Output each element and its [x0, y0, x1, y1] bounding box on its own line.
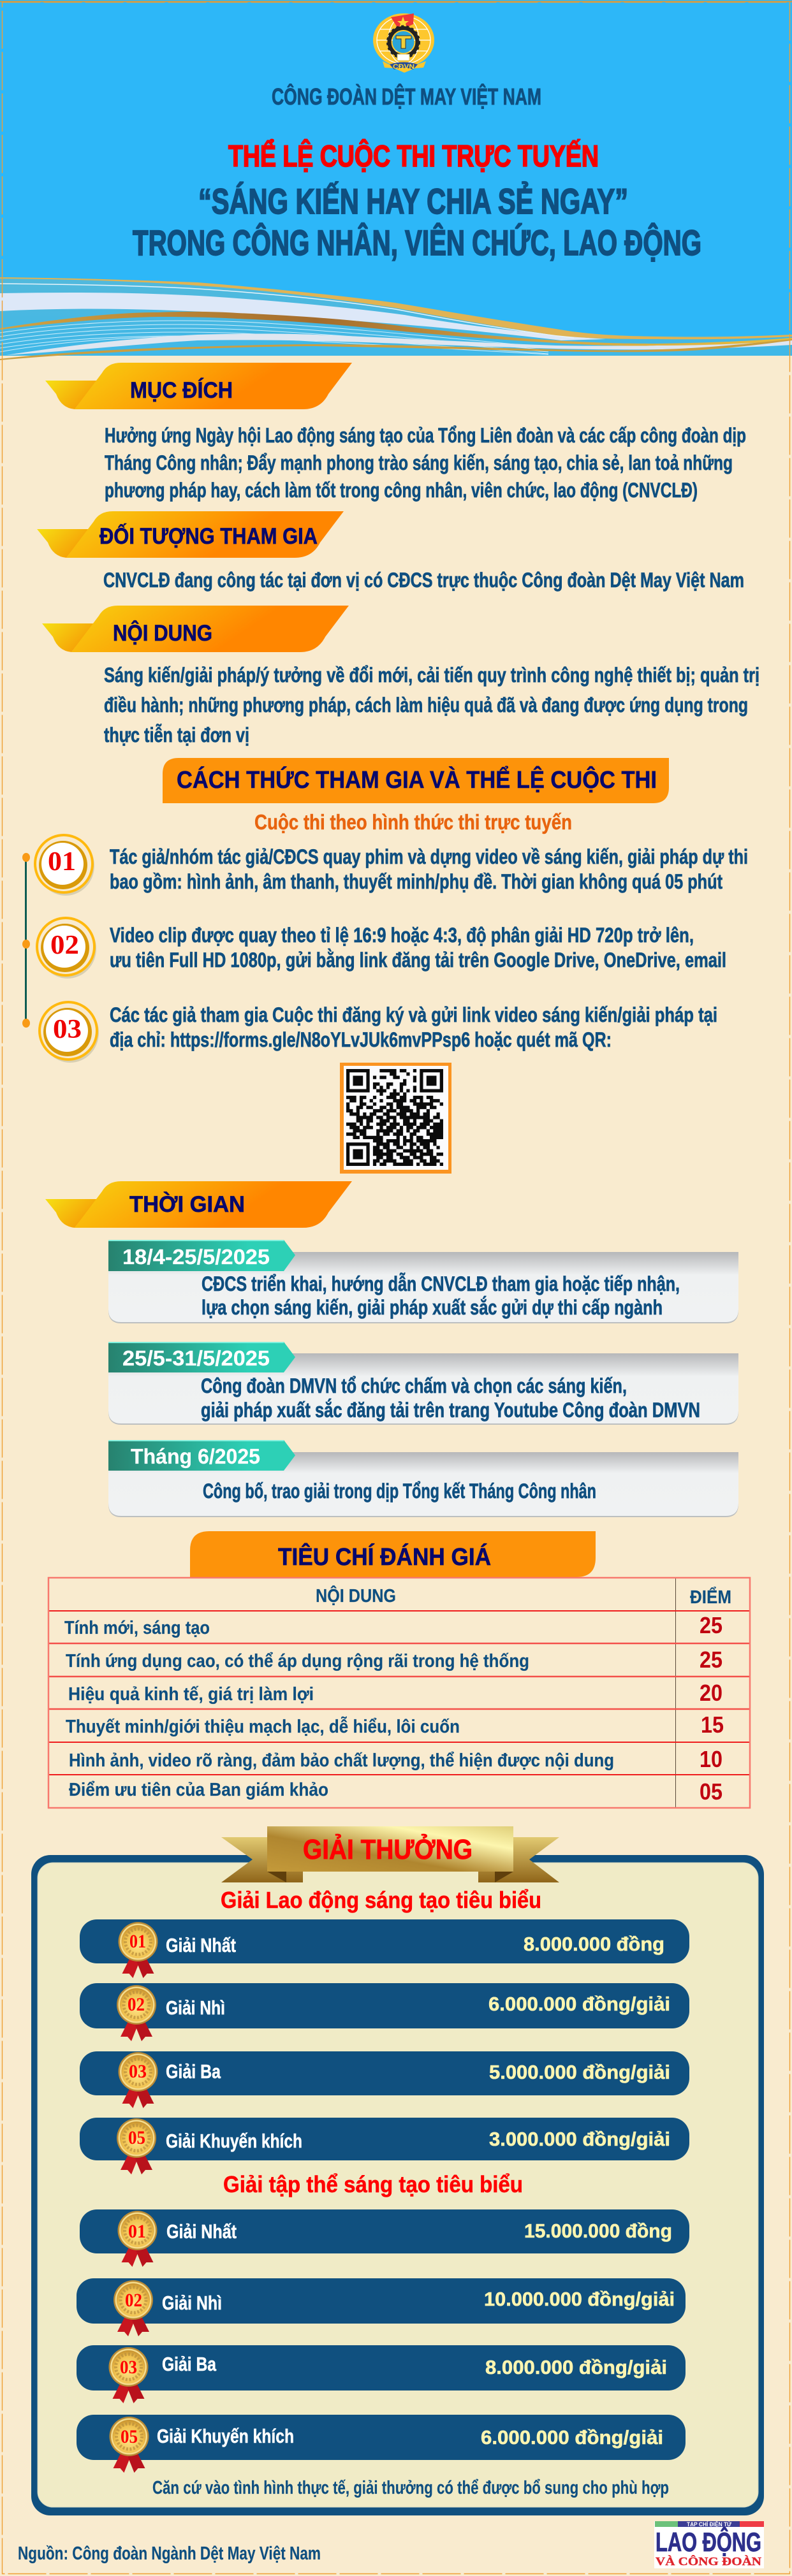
card 1 text: lựa chọn sáng kiến, giải pháp xuất sắc gửi dự thi cấp ngành — [202, 1296, 663, 1319]
table header: ĐIỂM — [690, 1586, 731, 1608]
icon: medal 01 — [119, 1922, 158, 1978]
date tag 2 — [108, 1342, 295, 1372]
title: “SÁNG KIẾN HAY CHIA SẺ NGAY” — [198, 181, 628, 221]
prize row: individual consolation: 3.000.000 đồng/giải — [489, 2128, 670, 2150]
date tag 1: 18/4-25/5/2025 — [122, 1245, 270, 1269]
icon: number badge 02 — [36, 917, 96, 979]
card 2 text — [201, 1374, 700, 1422]
QR code — [340, 1063, 451, 1174]
prize row: individual first: 8.000.000 đồng — [524, 1933, 664, 1955]
icon: medal 05 — [117, 2118, 156, 2174]
table row 3: Hiệu quả kinh tế, giá trị làm lợi — [68, 1684, 314, 1705]
logo: Lao Động và Công Đoàn — [654, 2521, 764, 2568]
table row 5: Hình ảnh, video rõ ràng, đảm bảo chất lượng, thể hiện được nội dung — [69, 1750, 614, 1771]
prize row: group second: Giải Nhì — [162, 2292, 222, 2314]
banner: Tiêu chí đánh giá: TIÊU CHÍ ĐÁNH GIÁ — [278, 1543, 491, 1571]
ribbon heading: Giải thưởng: GIẢI THƯỞNG — [303, 1833, 473, 1865]
step 02 — [36, 917, 726, 979]
icon: number badge 03 — [38, 1001, 99, 1063]
text block: Nội dung — [104, 664, 759, 746]
prize row: individual third: 5.000.000 đồng/giải — [489, 2061, 670, 2083]
table row 1: Tính mới, sáng tạo — [64, 1618, 210, 1638]
table row 1 — [64, 1612, 722, 1638]
heading: Thời gian — [45, 1181, 352, 1228]
heading: Thời gian: THỜI GIAN — [129, 1191, 245, 1217]
heading: Đối tượng tham gia — [37, 511, 344, 558]
card 1 text — [202, 1272, 680, 1319]
heading: Nội dung: NỘI DUNG — [113, 620, 212, 646]
icon: medal 03: 03 — [129, 2061, 147, 2082]
icon: medal 02 — [117, 1985, 156, 2041]
organisation name: CÔNG ĐOÀN DỆT MAY VIỆT NAM — [272, 83, 541, 110]
ribbon heading: Giải thưởng — [221, 1826, 559, 1882]
header wave decoration — [0, 277, 792, 360]
table row 4: 15 — [701, 1712, 724, 1738]
card 3 text: Công bố, trao giải trong dịp Tổng kết Tháng Công nhân — [203, 1480, 596, 1503]
prize row: individual second — [80, 1983, 689, 2041]
logo: Lao Động và Công Đoàn: VÀ CÔNG ĐOÀN — [656, 2554, 761, 2568]
prize row: group second — [77, 2278, 686, 2336]
step 03 text: địa chỉ: https://forms.gle/N8oYLvJUk6mvPPsp6 hoặc quét mã QR: — [110, 1028, 612, 1051]
prize row: group third: 8.000.000 đồng/giải — [485, 2356, 667, 2378]
prize row: group third: Giải Ba — [162, 2353, 217, 2375]
timeline connector — [22, 853, 30, 1028]
step 01 text — [110, 845, 748, 893]
step 01 — [34, 834, 748, 896]
prize row: group consolation — [77, 2415, 686, 2473]
timeline card 1 — [108, 1240, 738, 1323]
icon: medal 02: 02 — [125, 2290, 142, 2311]
title: THỂ LỆ CUỘC THI TRỰC TUYẾN — [228, 139, 599, 173]
table row 4: Thuyết minh/giới thiệu mạch lạc, dễ hiểu, lôi cuốn — [66, 1715, 460, 1737]
table header: NỘI DUNG — [316, 1585, 396, 1606]
table row 3 — [68, 1680, 722, 1706]
heading: Mục đích — [45, 363, 352, 409]
icon: number badge 01: 01 — [48, 847, 76, 877]
icon: medal 05: 05 — [128, 2127, 145, 2148]
table row 2: Tính ứng dụng cao, có thể áp dụng rộng rãi trong hệ thống — [66, 1651, 529, 1671]
icon: medal 03: 03 — [120, 2357, 137, 2378]
prize row: group first: 15.000.000 đồng — [524, 2220, 672, 2242]
logo: Lao Động và Công Đoàn: TẠP CHÍ ĐIỆN TỬ — [687, 2521, 731, 2528]
step 02 text — [110, 924, 726, 971]
card 2 text: Công đoàn DMVN tổ chức chấm và chọn các sáng kiến, — [201, 1374, 627, 1397]
step 03 text — [110, 1003, 717, 1051]
banner: Tiêu chí đánh giá — [190, 1531, 596, 1577]
prize row: group consolation: 6.000.000 đồng/giải — [481, 2426, 663, 2449]
timeline card 2 — [108, 1342, 738, 1425]
icon: medal 05: 05 — [121, 2426, 138, 2447]
date tag 3: Tháng 6/2025 — [131, 1444, 260, 1468]
heading: Mục đích: MỤC ĐÍCH — [130, 377, 233, 403]
icon: number badge 02: 02 — [50, 931, 79, 960]
text block: Mục đích — [105, 424, 746, 502]
table row 1: 25 — [700, 1612, 722, 1638]
icon: medal 01 — [117, 2211, 157, 2267]
icon: medal 03 — [119, 2052, 158, 2108]
text block: Nội dung: thực tiễn tại đơn vị — [104, 724, 249, 746]
icon: medal 02 — [114, 2280, 153, 2336]
source: Nguồn: Công đoàn Ngành Dệt May Việt Nam — [18, 2543, 321, 2564]
date tag 3 — [108, 1440, 295, 1471]
icon: number badge 03: 03 — [53, 1015, 82, 1044]
subheading: Giải tập thể sáng tạo tiêu biểu: Giải tập thể sáng tạo tiêu biểu — [223, 2171, 523, 2197]
icon: medal 02: 02 — [128, 1994, 145, 2015]
date tag 1 — [108, 1240, 295, 1271]
table row 2: 25 — [700, 1647, 722, 1673]
subheading: Cuộc thi theo hình thức thi trực tuyến — [254, 810, 572, 834]
icon: union emblem — [373, 13, 434, 73]
panel: prizes — [31, 1855, 764, 2515]
title — [133, 139, 701, 263]
prize row: individual second: 6.000.000 đồng/giải — [488, 1993, 670, 2015]
icon: union emblem: CĐVN — [393, 63, 414, 71]
scoring table — [48, 1578, 750, 1808]
heading: Đối tượng tham gia: ĐỐI TƯỢNG THAM GIA — [99, 523, 318, 549]
prize row: individual first — [80, 1919, 689, 1978]
banner: Cách thức tham gia: CÁCH THỨC THAM GIA VÀ THỂ LỆ CUỘC THI — [177, 765, 657, 794]
prize row: individual third: Giải Ba — [166, 2060, 221, 2083]
prize row: individual consolation — [80, 2118, 689, 2174]
table row 5: 10 — [700, 1746, 722, 1772]
prize row: group first — [80, 2209, 689, 2267]
prize row: group first: Giải Nhất — [166, 2220, 237, 2243]
timeline card 3 — [108, 1440, 738, 1517]
icon: medal 05 — [110, 2417, 149, 2473]
table header — [316, 1585, 731, 1608]
prize row: individual third — [80, 2051, 689, 2108]
prize row: individual second: Giải Nhì — [166, 1997, 225, 2019]
table row 2 — [66, 1647, 722, 1673]
prize row: individual first: Giải Nhất — [166, 1934, 236, 1956]
prize row: group second: 10.000.000 đồng/giải — [484, 2288, 675, 2310]
icon: medal 01: 01 — [128, 2221, 146, 2242]
icon: number badge 01 — [34, 834, 94, 896]
table row 6 — [69, 1779, 722, 1805]
step 03 — [38, 1001, 717, 1063]
icon: medal 01: 01 — [129, 1931, 146, 1952]
table row 6: Điểm ưu tiên của Ban giám khảo — [69, 1780, 328, 1800]
subheading: Giải Lao động sáng tạo tiêu biểu: Giải Lao động sáng tạo tiêu biểu — [221, 1887, 541, 1913]
prize row: individual consolation: Giải Khuyến khích — [166, 2130, 302, 2152]
heading: Nội dung — [42, 606, 349, 652]
date tag 2: 25/5-31/5/2025 — [122, 1346, 270, 1370]
table row 4 — [66, 1712, 724, 1738]
table row 6: 05 — [700, 1779, 722, 1805]
icon: medal 03 — [108, 2347, 148, 2403]
prize row: group consolation: Giải Khuyến khích — [157, 2425, 294, 2447]
banner: Cách thức tham gia — [163, 758, 669, 803]
table row 3: 20 — [700, 1680, 722, 1706]
prize row: group third — [77, 2345, 686, 2403]
